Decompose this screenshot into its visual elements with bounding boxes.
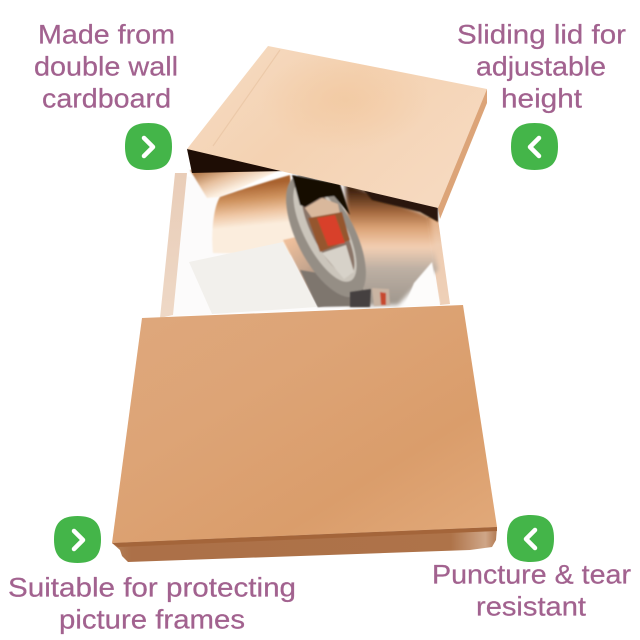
text: sliding lid: adjustable: [476, 52, 606, 82]
text: picture frames: picture frames: [59, 604, 245, 634]
text: double wall cardboard: [34, 20, 178, 114]
lid side edge: [438, 89, 487, 219]
lid crease: [213, 50, 280, 146]
icon: arrow top left: [125, 123, 172, 170]
box front edge: [112, 527, 497, 562]
panel: open box contents: [160, 149, 450, 318]
icon: arrow bottom right: [507, 515, 554, 562]
dark shadow under lid: [362, 188, 438, 222]
photo: small tape rolls: [350, 288, 390, 307]
white lining: [172, 174, 442, 316]
panel: lower box: [112, 305, 497, 562]
photo: wrapping paper: [190, 168, 440, 307]
text: sliding lid: height: [501, 84, 583, 114]
white card: [189, 242, 317, 314]
panel: sliding lid: [187, 46, 487, 219]
text: double wall cardboard: cardboard: [42, 84, 171, 114]
text: double wall cardboard: Made from: [38, 20, 175, 50]
icon: arrow top right: [511, 123, 558, 170]
text: sliding lid: Sliding lid for: [457, 20, 626, 50]
lid shading: [305, 78, 388, 124]
text: double wall cardboard: double wall: [34, 52, 178, 82]
text: picture frames: Suitable for protecting: [8, 572, 296, 602]
left tray wall: [160, 173, 187, 318]
text: picture frames: [8, 572, 296, 634]
icon: arrow bottom left: [54, 516, 101, 563]
text: puncture and tear: [432, 560, 631, 622]
box top surface: [112, 305, 497, 543]
dark lid interior: [187, 149, 292, 173]
text: sliding lid: [457, 20, 626, 114]
box front fold shadow: [112, 527, 497, 547]
text: puncture and tear: Puncture & tear: [432, 560, 631, 590]
lid top surface: [187, 46, 487, 208]
text: puncture and tear: resistant: [476, 592, 587, 622]
photo: tape roll: [270, 163, 382, 309]
right tray wall: [427, 212, 450, 305]
